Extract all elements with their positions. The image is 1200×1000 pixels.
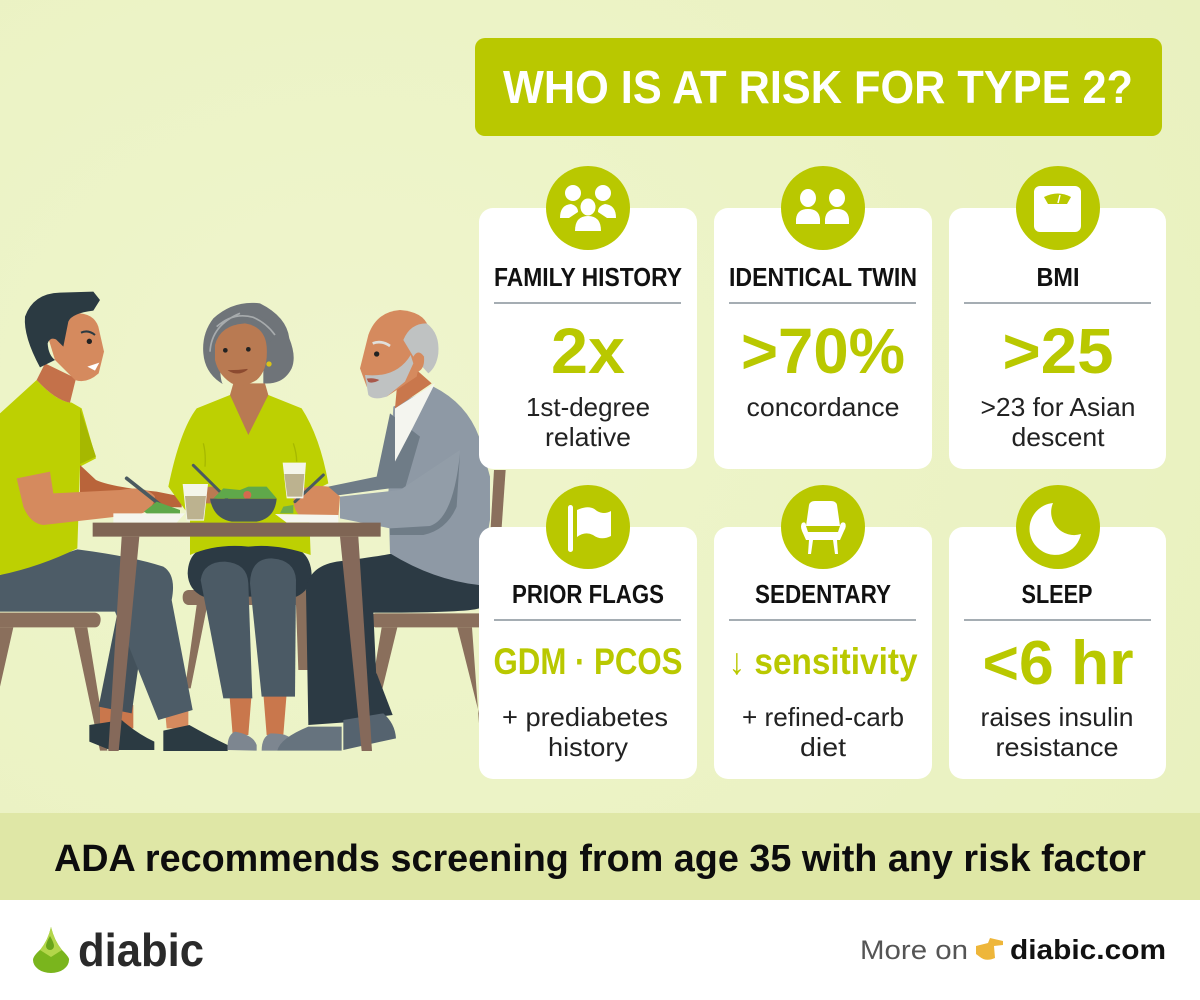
screening banner: ADA recommends screening from age 35 with any risk factor: [54, 838, 1146, 880]
chairs: [0, 470, 506, 751]
caption: [526, 392, 650, 452]
screening banner: [0, 813, 1200, 900]
panel: sedentary: [714, 485, 932, 779]
icon: scale: [1034, 186, 1081, 232]
icon: twins: [796, 189, 849, 224]
caption: raises insulin: [980, 702, 1134, 732]
caption: 1st-degree: [526, 392, 650, 422]
icon: pointing hand: [976, 938, 1003, 960]
caption: [742, 702, 904, 762]
caption: concordance: [746, 392, 900, 422]
heading: BMI: [1036, 262, 1080, 292]
caption: [502, 702, 668, 762]
icon: flag: [568, 505, 611, 552]
illustration: three people eating at a table: [0, 292, 506, 751]
caption: + prediabetes: [502, 702, 668, 732]
person: young man: [0, 292, 228, 751]
caption: resistance: [996, 732, 1118, 762]
heading: SLEEP: [1022, 579, 1092, 609]
icon: armchair: [801, 501, 846, 554]
icon: family: [560, 185, 616, 231]
value: >25: [1002, 315, 1114, 387]
caption: [980, 702, 1134, 762]
logo: diabic: diabic: [78, 924, 204, 976]
caption: relative: [545, 422, 631, 452]
heading: SEDENTARY: [755, 579, 891, 609]
icon: moon: [1030, 503, 1081, 555]
heading: IDENTICAL TWIN: [729, 262, 917, 292]
person: older man: [277, 310, 490, 751]
value: 2x: [551, 315, 625, 387]
link: more on diabic.com: [860, 934, 1166, 965]
person: older woman: [168, 303, 328, 751]
panel: prior flags: [479, 485, 697, 779]
value: ↓ sensitivity: [728, 641, 918, 682]
value: GDM · PCOS: [494, 641, 682, 682]
link: more on diabic.com: More on: [860, 935, 968, 965]
link: more on diabic.com: diabic.com: [1010, 934, 1166, 965]
caption: [980, 392, 1136, 452]
panel: family history: [479, 166, 697, 469]
caption: >23 for Asian: [980, 392, 1136, 422]
value: >70%: [741, 315, 905, 387]
caption: descent: [1012, 422, 1105, 452]
footer: [0, 900, 1200, 1000]
title banner: WHO IS AT RISK FOR TYPE 2?: [503, 61, 1133, 113]
caption: + refined-carb: [742, 702, 904, 732]
heading: PRIOR FLAGS: [512, 579, 664, 609]
title banner: [475, 38, 1162, 136]
caption: diet: [800, 732, 847, 762]
panel: identical twin: [714, 166, 932, 469]
caption: history: [548, 732, 628, 762]
panel: sleep: [949, 485, 1166, 779]
panel: BMI: [949, 166, 1166, 469]
value: <6 hr: [982, 629, 1134, 698]
table with meal: [93, 463, 381, 751]
heading: FAMILY HISTORY: [494, 262, 682, 292]
